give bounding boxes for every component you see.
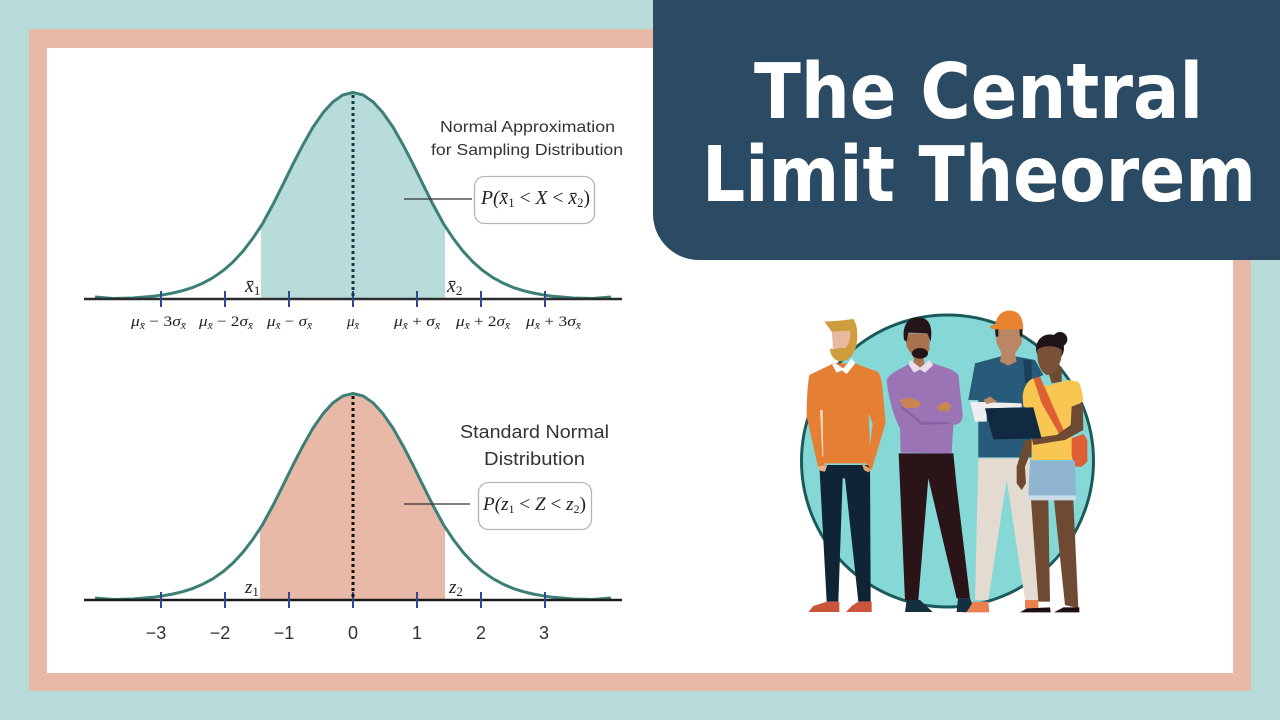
axis labels: σ (239, 314, 247, 330)
axis labels: x̄ (534, 321, 541, 332)
callout: probability expression (478, 482, 592, 530)
chart: normal approximation for sampling distribution (84, 92, 623, 332)
z2 bound label: z (449, 577, 456, 598)
axis labels: + (408, 314, 426, 330)
axis labels: x̄ (180, 321, 187, 332)
callout: probability expression: ) (583, 187, 590, 209)
title banner (653, 0, 1280, 260)
person: woman in yellow shirt with red bag (1017, 332, 1087, 612)
axis labels: μ (456, 314, 464, 330)
axis numbers: 0 (348, 623, 358, 643)
person: man in orange sweater (807, 319, 886, 612)
axis labels: + 3 (540, 314, 567, 330)
callout: probability expression: 1 (509, 502, 515, 516)
chart title: Standard Normal (460, 422, 609, 442)
axis labels: μ (131, 314, 139, 330)
axis ticks (161, 592, 545, 608)
axis labels: x̄ (306, 321, 313, 332)
person: man in purple sweater (887, 317, 972, 612)
axis labels: x̄ (354, 321, 360, 332)
axis ticks (161, 291, 545, 307)
callout: probability expression: Z < z (535, 494, 573, 515)
chart title (460, 422, 609, 469)
x1 bound label: 1 (254, 283, 260, 298)
axis labels: μ (347, 314, 355, 330)
bell curve (95, 92, 611, 298)
axis numbers: 3 (539, 623, 549, 643)
axis numbers (146, 623, 549, 643)
axis labels: μ (267, 314, 275, 330)
axis labels: x̄ (434, 321, 441, 332)
shaded area between x1 and x2 (261, 92, 445, 299)
callout: probability expression: < (515, 494, 535, 515)
axis labels: μ (394, 314, 402, 330)
axis (84, 599, 622, 601)
axis labels (130, 314, 582, 332)
axis labels: x̄ (504, 321, 511, 332)
chart title (431, 119, 623, 159)
callout: probability expression: 1 (508, 195, 515, 210)
illustration: group of people in front of circle (802, 311, 1094, 612)
axis labels: μ (526, 314, 534, 330)
axis labels: σ (496, 314, 504, 330)
z1 bound label: z (245, 577, 252, 598)
axis labels: x̄ (402, 321, 408, 332)
chart: standard normal distribution (84, 394, 622, 643)
axis labels: μ (199, 314, 207, 330)
title text: The Central (754, 48, 1203, 137)
callout: probability expression: ) (580, 494, 586, 515)
bell curve (95, 394, 611, 600)
axis labels: σ (426, 314, 434, 330)
axis numbers: −2 (210, 623, 230, 643)
callout: probability expression: P(x̄ (481, 187, 509, 209)
z2 bound label: 2 (456, 584, 463, 599)
leader line (404, 503, 470, 505)
mean dotted line (352, 396, 354, 599)
axis labels: x̄ (575, 321, 582, 332)
shaded area between z1 and z2 (260, 394, 445, 600)
x1 bound label: x̄ (245, 275, 254, 297)
axis labels: x̄ (274, 321, 281, 332)
axis labels: σ (299, 314, 306, 330)
axis labels: − 3 (145, 314, 172, 330)
z1 bound label: 1 (252, 584, 259, 599)
callout: probability expression: X < x̄ (535, 187, 577, 209)
teal circle (802, 315, 1094, 607)
mean dotted line (352, 95, 354, 298)
chart title: for Sampling Distribution (431, 142, 623, 159)
callout: probability expression: P(z (483, 494, 508, 515)
axis labels: σ (567, 314, 575, 330)
axis numbers: 2 (476, 623, 486, 643)
axis (84, 298, 622, 300)
axis labels: x̄ (463, 321, 470, 332)
laptop (985, 407, 1042, 439)
axis labels: x̄ (139, 321, 146, 332)
callout: probability expression (474, 176, 594, 224)
callout: probability expression: 2 (577, 195, 583, 210)
callout: probability expression: 2 (574, 502, 580, 516)
chart title: Distribution (484, 449, 585, 469)
axis labels: x̄ (247, 321, 254, 332)
axis numbers: −3 (146, 623, 166, 643)
axis labels: − (281, 314, 299, 330)
title text (702, 48, 1256, 220)
leader line (404, 198, 472, 200)
chart title: Normal Approximation (440, 119, 615, 136)
axis numbers: 1 (412, 623, 422, 643)
x2 bound label: x̄ (447, 275, 456, 297)
axis labels: x̄ (206, 321, 213, 332)
axis labels: − 2 (213, 314, 239, 330)
axis labels: σ (172, 314, 180, 330)
callout: probability expression: < (515, 187, 535, 209)
axis numbers: −1 (274, 623, 294, 643)
person: man in blue shirt with orange cap (963, 311, 1043, 612)
x2 bound label: 2 (456, 283, 462, 298)
axis labels: + 2 (470, 314, 496, 330)
